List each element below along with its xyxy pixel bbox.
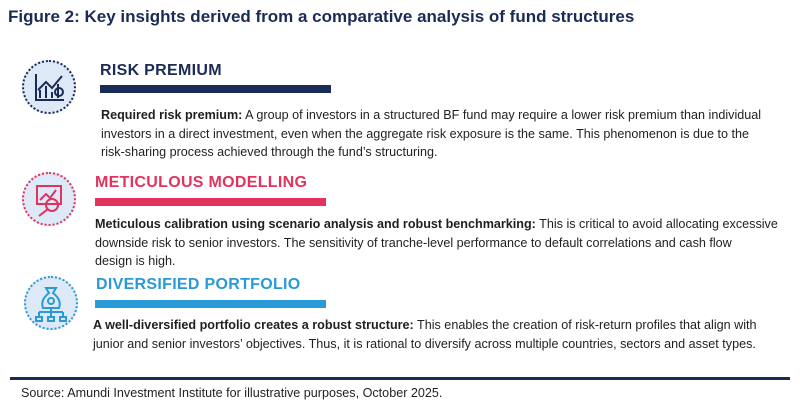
icon: money bag hierarchy (24, 276, 78, 330)
text: downside risk to senior investors. The sensitivity of tranche-level performance to default correlations and cash flow (95, 236, 732, 250)
icon: magnifier (22, 172, 76, 226)
bar (95, 300, 326, 308)
bar (100, 85, 331, 93)
text: Meticulous calibration using scenario analysis and robust benchmarking: This is critical to avoid allocating excessive (95, 217, 778, 231)
text: A well-diversified portfolio creates a robust structure: This enables the creation of risk-return profiles that align with (93, 318, 757, 332)
panel: risk premium (22, 60, 761, 159)
title: Figure 2: Key insights derived from a comparative analysis of fund structures (8, 7, 634, 26)
text: junior and senior investors’ objectives. Thus, it is rational to diversify across multiple countries, sectors and asset types. (93, 336, 756, 350)
icon: chart (22, 60, 76, 114)
panel: diversified portfolio (24, 276, 757, 350)
heading: DIVERSIFIED PORTFOLIO (96, 276, 301, 293)
text (95, 217, 778, 268)
heading: RISK PREMIUM (100, 62, 222, 79)
footer divider (10, 377, 790, 380)
text (101, 108, 761, 159)
text: investors in a direct investment, even when the aggregate risk exposure is the same. This phenomenon is due to the (101, 126, 749, 140)
text: risk-sharing process achieved through the fund’s structuring. (101, 145, 437, 159)
text: Required risk premium: A group of investors in a structured BF fund may require a lower risk premium than individual (101, 108, 761, 122)
panel: meticulous modelling (22, 172, 778, 268)
text (92, 318, 757, 350)
text: design is high. (95, 254, 176, 268)
heading: METICULOUS MODELLING (95, 174, 307, 191)
bar (95, 198, 326, 206)
source: Source: Amundi Investment Institute for illustrative purposes, October 2025. (21, 386, 442, 400)
